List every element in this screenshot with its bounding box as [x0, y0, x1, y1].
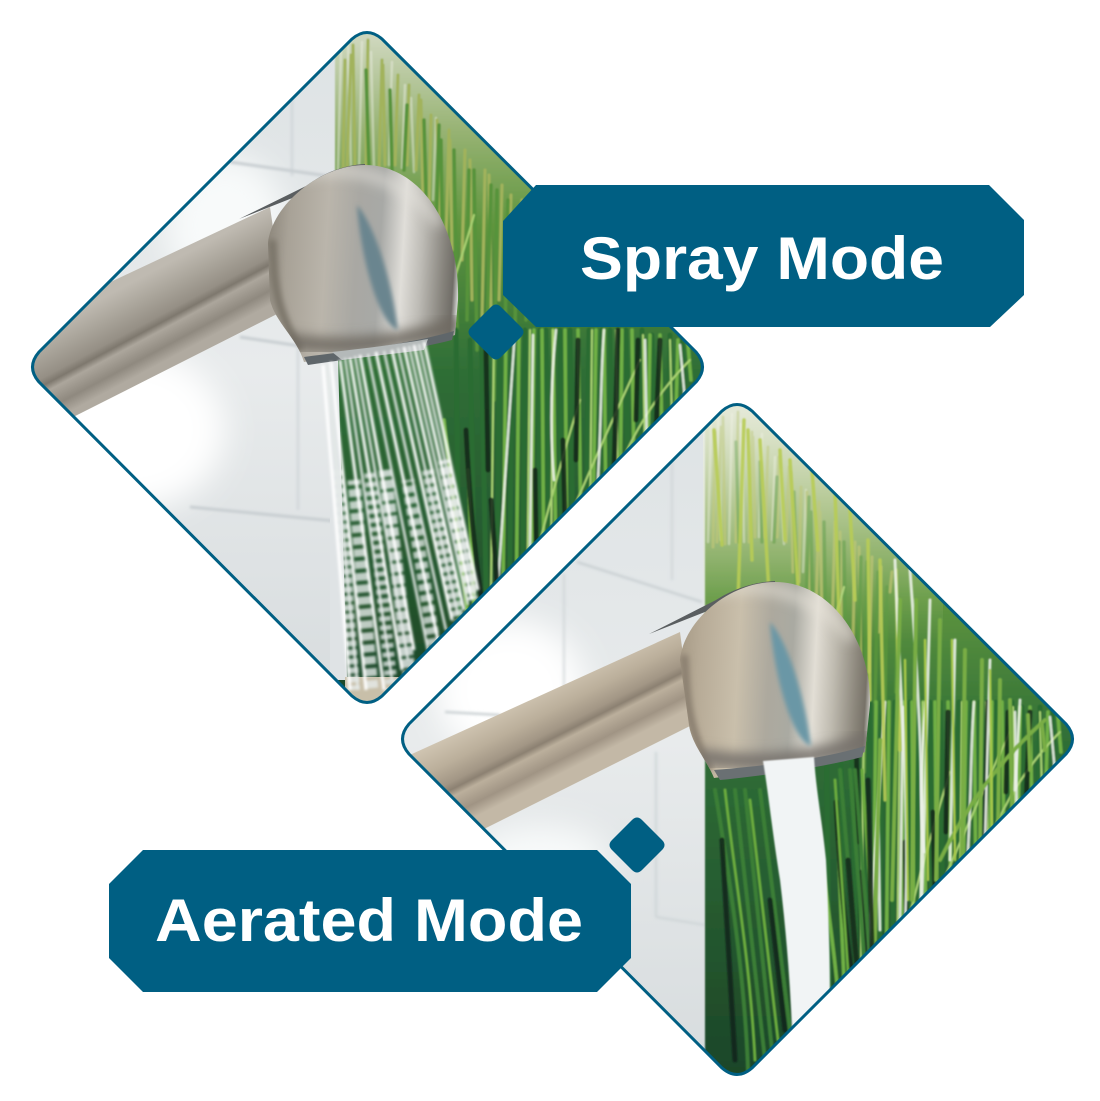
icon: small diamond spray	[468, 304, 524, 360]
faucet spout	[34, 207, 276, 416]
diamond outline	[32, 32, 702, 702]
counter edge	[345, 677, 399, 701]
grass background	[335, 30, 715, 720]
grass background	[705, 402, 1085, 1092]
panel: spray mode photo	[0, 20, 715, 720]
pale haze over upper grass	[703, 405, 943, 640]
label: spray mode	[503, 185, 1024, 327]
aerated water stream	[763, 757, 830, 1030]
label text: spray mode: Spray Mode	[580, 225, 944, 292]
faucet spout	[411, 632, 690, 828]
panel: aerated mode photo	[390, 390, 1085, 1092]
tile wall	[112, 58, 336, 672]
icon: small diamond aerated	[610, 818, 664, 872]
label text: aerated mode: Aerated Mode	[155, 887, 583, 954]
diamond outline	[402, 404, 1072, 1074]
faucet head	[649, 581, 872, 780]
wall sliver beside water	[330, 360, 347, 680]
label: aerated mode	[109, 850, 631, 992]
faucet head	[239, 164, 460, 365]
water spray	[323, 342, 478, 690]
bright grass overlay	[714, 420, 1045, 1070]
tile wall	[404, 430, 706, 1049]
